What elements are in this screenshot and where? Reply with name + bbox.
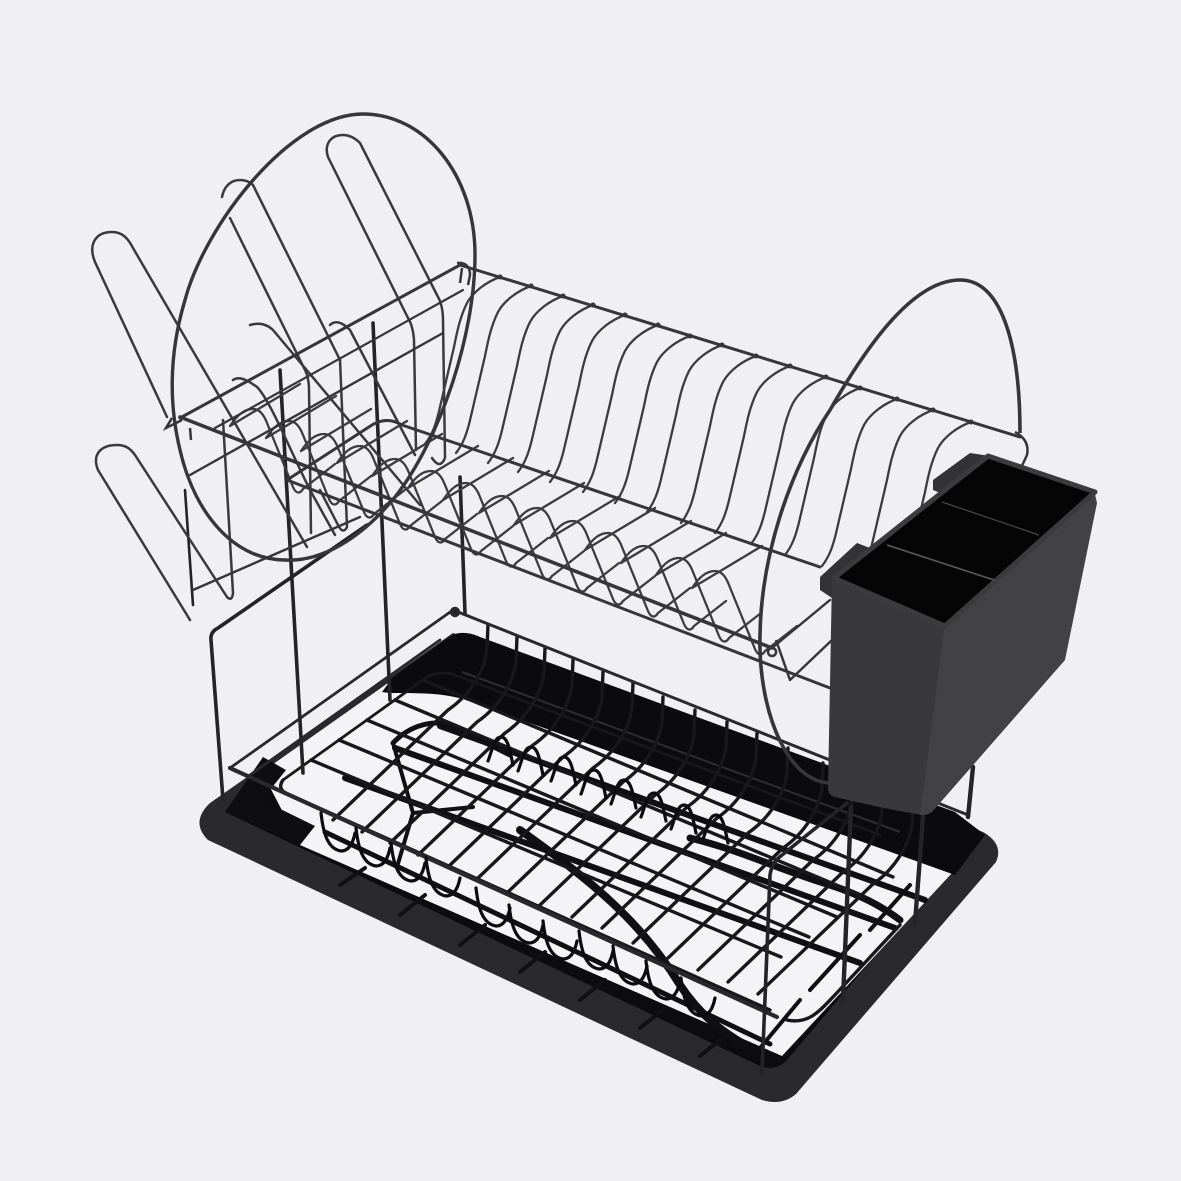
rail ticks (500, 277, 971, 422)
hook: lower outer (96, 420, 233, 620)
ring clasps (768, 432, 1028, 680)
right lid ring (760, 280, 1028, 783)
lower rack rails (230, 608, 968, 1017)
tray inner black lip (225, 645, 975, 1068)
tray left corner block (225, 757, 315, 845)
drip tray (199, 633, 998, 1102)
cutlery holder (820, 453, 1097, 815)
holder dividers (887, 545, 994, 580)
ring clasps (166, 263, 470, 440)
lower rack teeth (321, 737, 728, 1016)
tray floor (262, 678, 953, 1056)
lower rack long wires (281, 673, 900, 1021)
tray back wall (382, 633, 985, 875)
lower rack cross wires (333, 625, 913, 994)
tray ribs (325, 723, 925, 1056)
holder hanging tabs (820, 543, 875, 600)
left lid ring (166, 114, 475, 560)
hook: middle inner (250, 322, 420, 531)
holder opening (834, 456, 1095, 626)
upper rack plate wires (425, 277, 971, 589)
holder side face (920, 490, 1097, 815)
hook: upper outer (92, 232, 307, 547)
support frame and posts (185, 323, 973, 1073)
hook: second (222, 180, 340, 533)
upper rack rails (180, 265, 1020, 688)
hook: third (327, 135, 445, 464)
tray back wall ridge (462, 672, 900, 832)
tray outer body (199, 633, 998, 1102)
plate and lid holder hooks (92, 135, 445, 620)
holder front face (828, 578, 945, 815)
lower wire rack (230, 608, 968, 1021)
upper rack hump wires (230, 384, 797, 655)
